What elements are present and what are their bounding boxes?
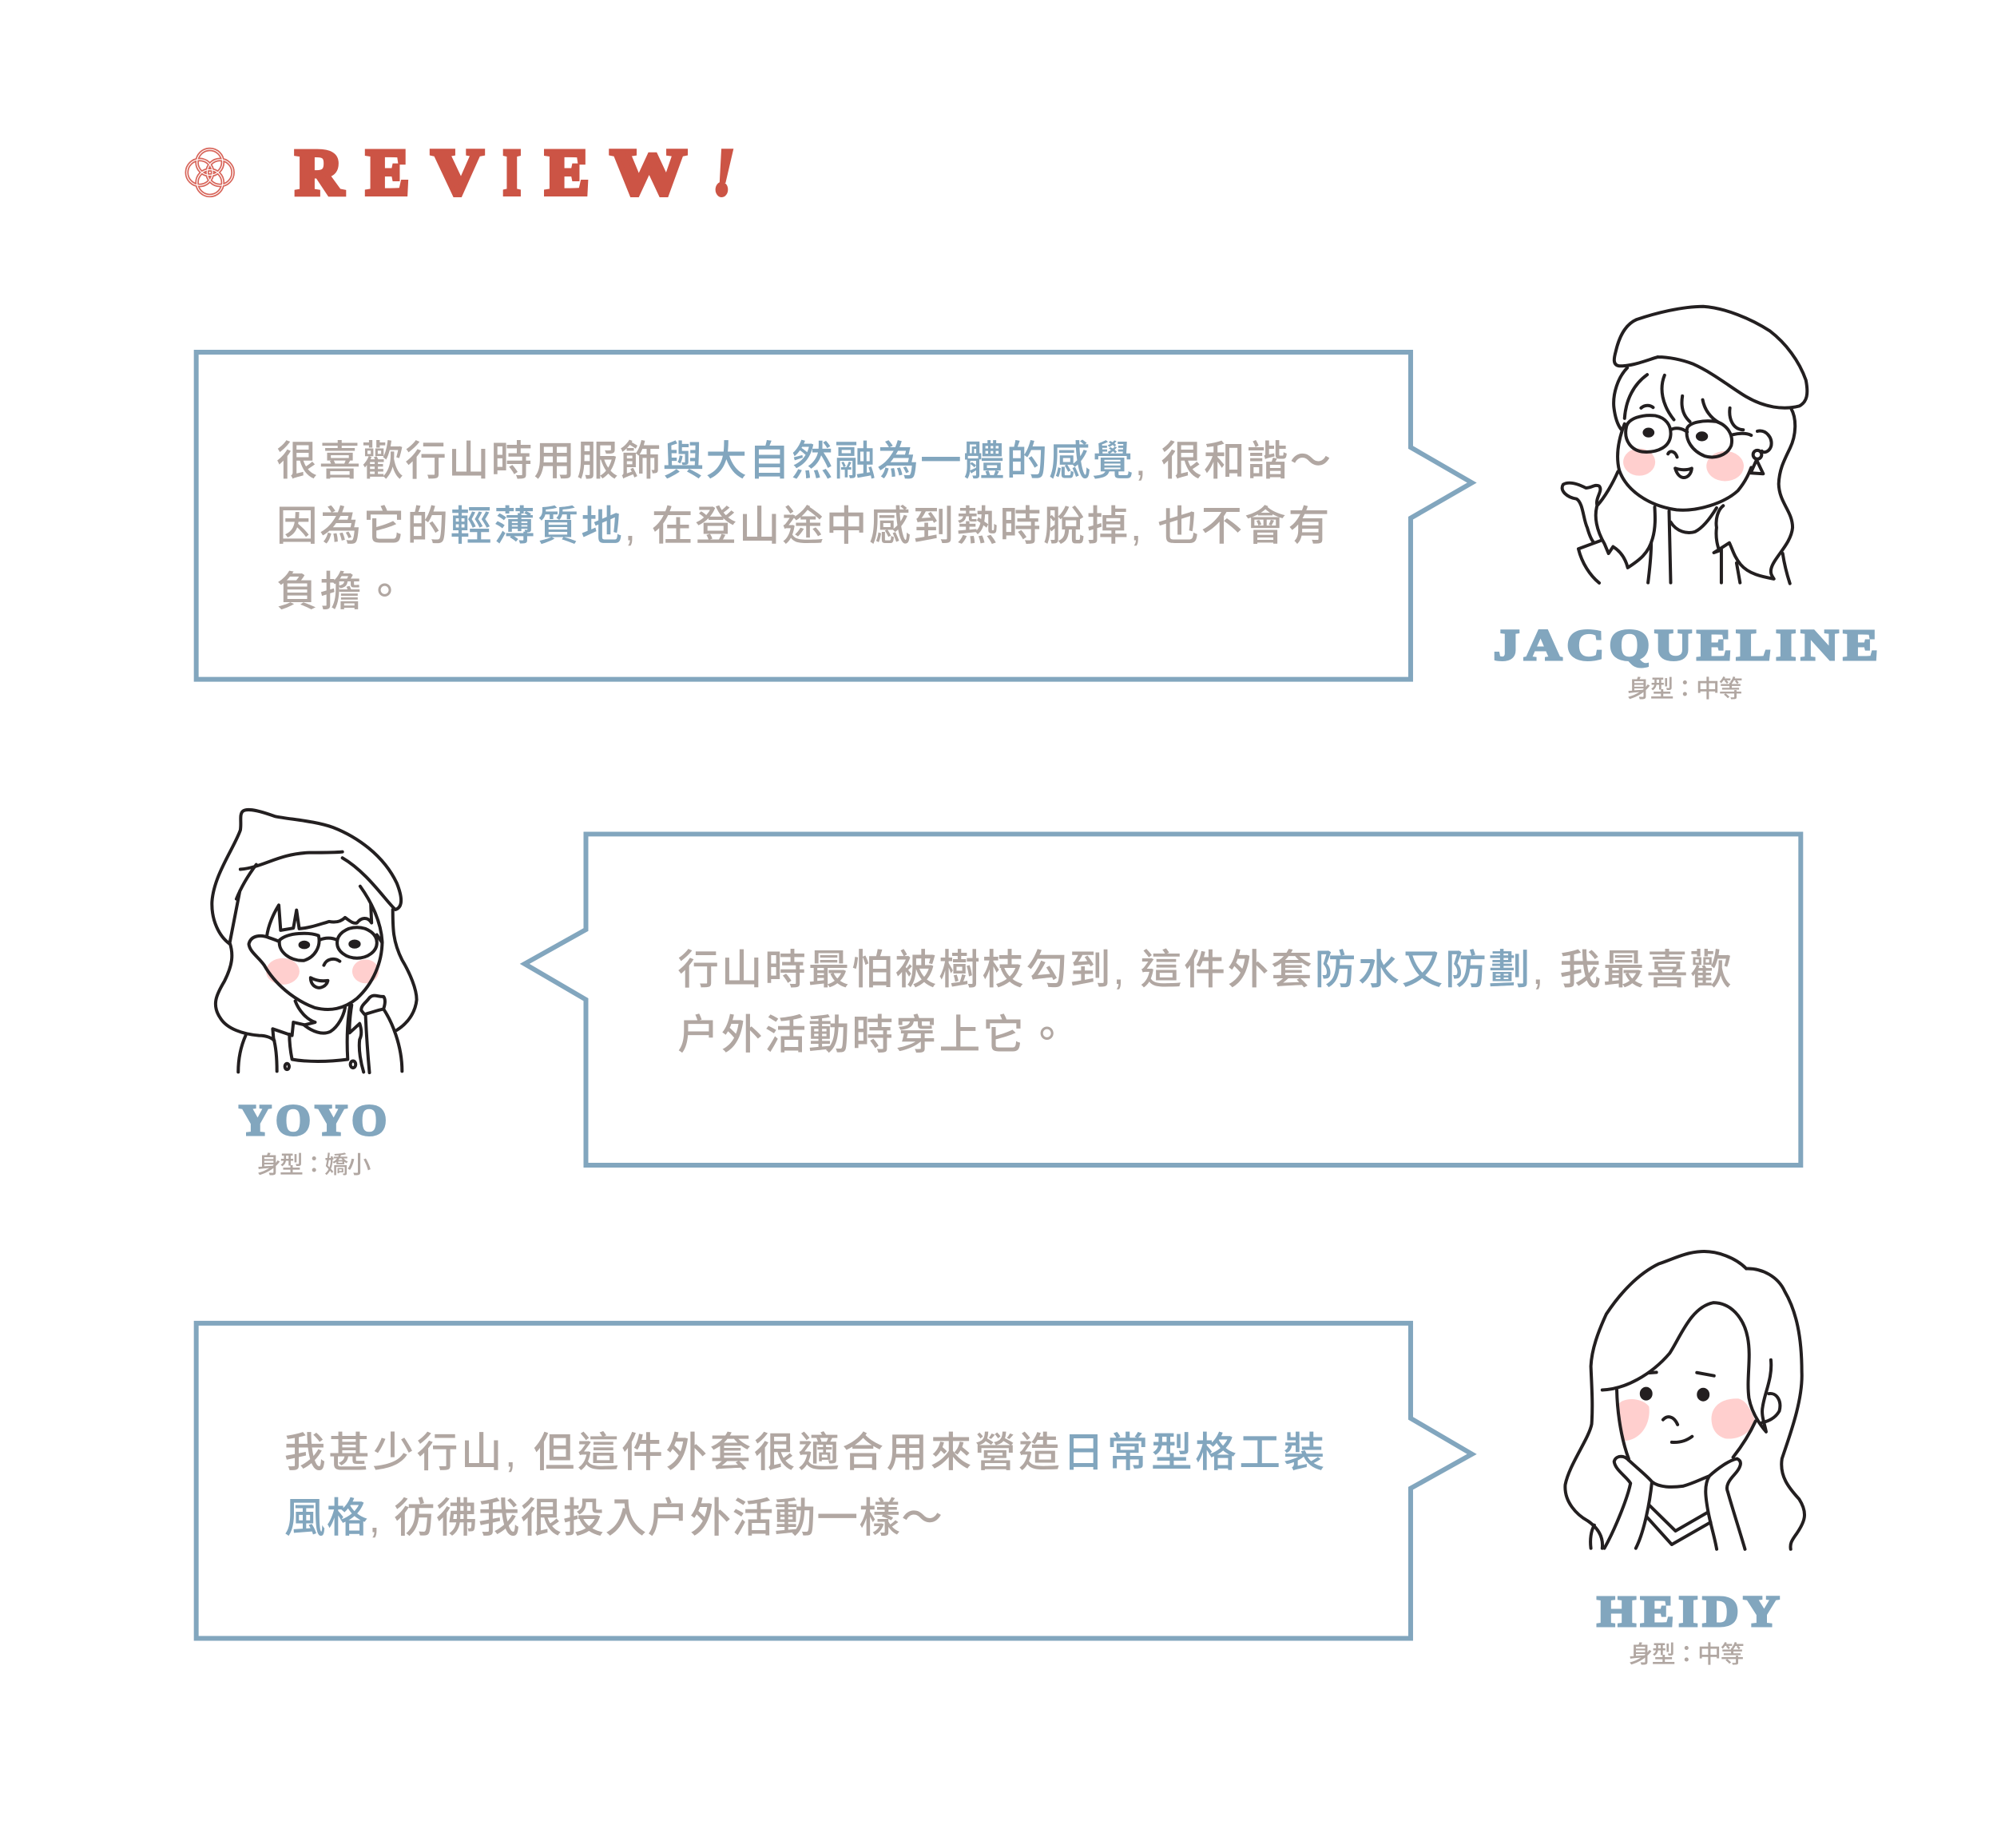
- panel: Jacqueline speech bubble: [197, 352, 1472, 680]
- title: REVIEW!: !: [713, 136, 734, 208]
- bubble outline: [197, 1323, 1472, 1639]
- title: REVIEW!: E: [546, 136, 589, 208]
- review text: [284, 1430, 1324, 1541]
- review text: 因為它的輕薄質地, 在登山途中感到熱時脫掉, 也不會有: [276, 503, 1329, 549]
- title: REVIEW!: [296, 136, 734, 208]
- name: YOYO: YOYO: [239, 1096, 391, 1144]
- panel: Heidy speech bubble: [197, 1323, 1472, 1639]
- name: HEIDY: HEIDY: [1597, 1587, 1784, 1636]
- review text: [276, 438, 1331, 617]
- caption: body type petite: 身型：嬌小: [257, 1145, 371, 1180]
- review text: 户外活動時穿上它。: [677, 1001, 1067, 1061]
- icon: knot emblem: [187, 149, 233, 196]
- panel: Yoyo speech bubble: [525, 834, 1800, 1165]
- page content: [187, 136, 1883, 1670]
- review text: 行山時最怕被樹枝勾到, 這件外套防水又防劃, 我最喜歡: [677, 946, 1732, 993]
- review text: 風格, 彷彿我很投入户外活動一樣～: [284, 1494, 943, 1541]
- bubble outline: [525, 834, 1800, 1165]
- illustration: Heidy: [1565, 1251, 1804, 1549]
- bubble outline: [197, 352, 1472, 680]
- title: REVIEW!: R: [296, 136, 344, 208]
- title: REVIEW!: I: [503, 136, 521, 208]
- title: REVIEW!: E: [366, 136, 409, 208]
- illustration: Yoyo: [212, 810, 417, 1073]
- review text: 負擔。: [276, 557, 405, 617]
- caption: body type medium: 身型：中等: [1629, 1635, 1745, 1670]
- title: REVIEW!: V: [431, 136, 483, 208]
- caption: body type medium: 身型：中等: [1627, 669, 1743, 704]
- title: REVIEW!: W: [610, 136, 686, 208]
- review text: 很喜歡行山時用服飾與大自然融為一體的感覺, 很和諧～: [276, 438, 1331, 484]
- illustration: Jacqueline: [1562, 307, 1807, 584]
- name: JACQUELINE: JACQUELINE: [1494, 621, 1883, 669]
- review text: [677, 946, 1732, 1061]
- review text: 我甚少行山, 但這件外套很適合用來營造日常型格工裝: [284, 1430, 1324, 1476]
